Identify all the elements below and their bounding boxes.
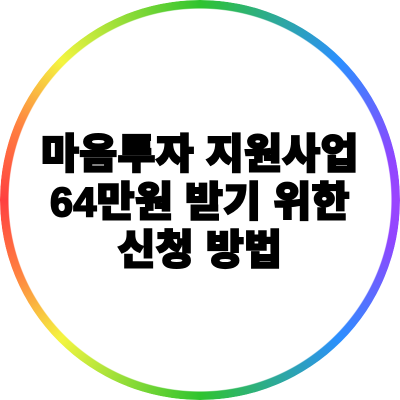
title line 2: 64만원 받기 위한	[50, 179, 350, 225]
title line 1: 마음투자 지원사업	[41, 131, 359, 177]
title line 3: 신청 방법	[118, 227, 282, 273]
title	[41, 131, 359, 273]
